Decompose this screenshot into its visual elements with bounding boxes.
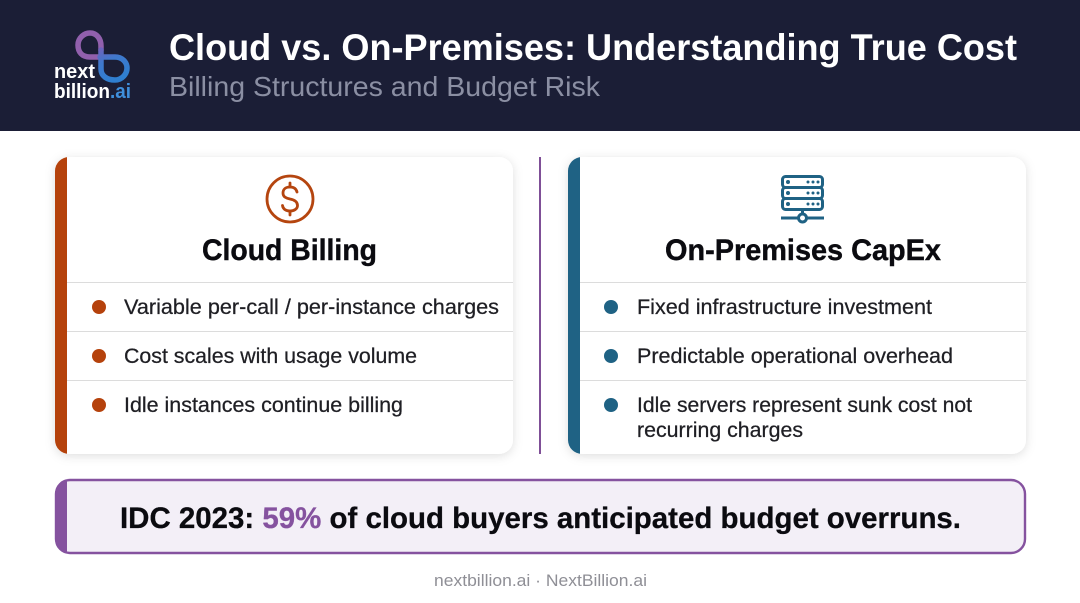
bullet: predictable overhead: Predictable operational overhead: [637, 345, 953, 368]
panel: cloud billing: [55, 157, 513, 454]
callout text: IDC 2023: 59% of cloud buyers anticipated budget overruns.: [120, 502, 961, 535]
callout: IDC statistic: [55, 479, 1025, 554]
logo wordmark: billion: [54, 81, 110, 103]
subtitle: Billing Structures and Budget Risk: [169, 71, 600, 102]
bullet: idle billing: Idle instances continue billing: [124, 394, 403, 417]
bullet: per-call charges: Variable per-call / per-instance charges: [124, 296, 499, 319]
logo wordmark: [54, 61, 131, 103]
title: Cloud vs. On-Premises: Understanding True Cost: [169, 27, 1017, 68]
logo wordmark: next: [54, 61, 95, 83]
logo mark: [78, 33, 127, 80]
panel: on-premises capex: [568, 157, 1026, 454]
bullet: fixed investment: Fixed infrastructure investment: [637, 296, 932, 319]
bullet: idle servers: [604, 394, 972, 442]
bullet: idle servers: Idle servers represent sunk cost not: [637, 394, 972, 417]
footer: nextbillion.ai · NextBillion.ai: [434, 572, 647, 590]
bullet: idle servers: recurring charges: [637, 419, 803, 442]
heading: on-premises capex: On-Premises CapEx: [665, 234, 941, 267]
logo wordmark: .ai: [110, 81, 131, 103]
heading: cloud billing: Cloud Billing: [202, 234, 377, 267]
icon: dollar: [267, 176, 313, 222]
bullet: usage scaling: Cost scales with usage volume: [124, 345, 417, 368]
header band: [0, 0, 1080, 131]
center divider: [539, 157, 541, 454]
logo: [54, 33, 131, 103]
icon: server rack: [781, 176, 824, 222]
